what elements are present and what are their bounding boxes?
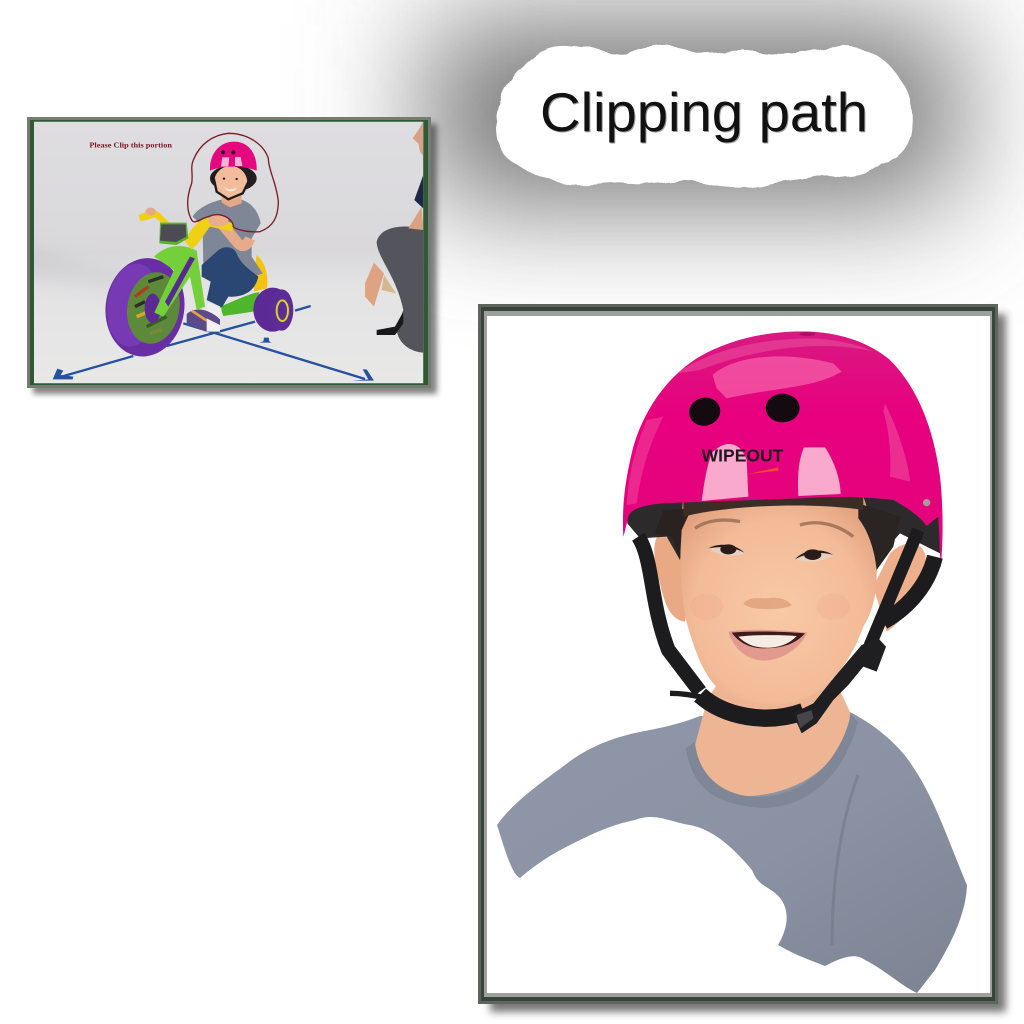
shirt collar (686, 714, 858, 808)
shirt (193, 199, 263, 277)
right strap (867, 530, 918, 653)
rivet (923, 499, 930, 506)
brows (695, 520, 740, 528)
base (220, 292, 259, 316)
hand (365, 263, 384, 307)
clipped white background (487, 316, 990, 993)
rear wheel (253, 288, 280, 332)
front wheel (105, 258, 185, 356)
neck (694, 680, 850, 796)
helmet (210, 142, 257, 171)
tape arrows (53, 338, 374, 381)
helmet highlights (221, 157, 229, 167)
nose (743, 598, 792, 609)
helmet liner (627, 487, 940, 560)
shoe (187, 310, 220, 332)
arm (220, 222, 250, 246)
helmet logo (702, 445, 784, 474)
pants (377, 227, 423, 353)
eyes and smile (223, 177, 238, 191)
head drawing (623, 332, 943, 733)
right ear (873, 543, 926, 632)
helmet reflections (702, 444, 841, 501)
photo caption: Please Clip this portion (89, 141, 173, 150)
eyes (708, 544, 833, 562)
arm (408, 207, 423, 230)
straps (213, 173, 252, 199)
helmet logo: WIPEOUT (702, 445, 784, 465)
face (680, 497, 877, 705)
floor tape (62, 306, 365, 379)
frame shadow (33, 124, 437, 394)
helmet sheen (713, 356, 842, 398)
kid head (210, 142, 257, 207)
helmet shell (623, 332, 943, 568)
panel: source photo (20, 117, 437, 394)
shirt sleeve seam (832, 775, 858, 945)
outer right strap (883, 557, 935, 622)
title text: Clipping path (541, 82, 869, 144)
chin strap (700, 695, 803, 718)
left strap (638, 537, 700, 692)
hair (210, 166, 257, 190)
panel: clipped result (478, 304, 1006, 1012)
seat (253, 255, 267, 292)
buckle (793, 638, 886, 733)
kid body (187, 199, 263, 332)
left strap tail (670, 693, 707, 698)
tricycle front (99, 208, 233, 362)
frame shadow (490, 314, 1006, 1012)
buckle clip (797, 710, 813, 728)
frame (27, 117, 431, 388)
cheeks (690, 593, 723, 620)
jeans (202, 247, 258, 307)
hands (208, 215, 228, 227)
wheel hub (127, 272, 180, 344)
cloud shape (496, 46, 912, 188)
blurred grey shadow behind cloud (430, 25, 955, 200)
handlebars (138, 211, 170, 223)
hair (655, 508, 692, 560)
title cloud (496, 46, 912, 188)
face (413, 122, 423, 157)
sock (206, 303, 222, 318)
crate (382, 275, 396, 293)
number plate (159, 223, 188, 245)
fork (154, 246, 205, 317)
frame (478, 304, 998, 1004)
mouth (728, 630, 807, 661)
clipping outline (188, 133, 278, 232)
helmet vents (686, 332, 815, 429)
neck (222, 195, 242, 208)
scaled photo drawing (20, 122, 423, 383)
adult crouching (365, 122, 423, 353)
title text: Clipping path (540, 81, 868, 143)
tricycle rear (220, 255, 293, 332)
studio floor shading (34, 255, 117, 288)
left ear (654, 533, 693, 622)
face (214, 166, 247, 199)
helmet vents (221, 150, 225, 154)
chin straps (638, 530, 935, 733)
shirt (414, 175, 423, 208)
photo background (34, 122, 423, 383)
t-shirt (497, 712, 967, 993)
shoe (377, 312, 403, 335)
